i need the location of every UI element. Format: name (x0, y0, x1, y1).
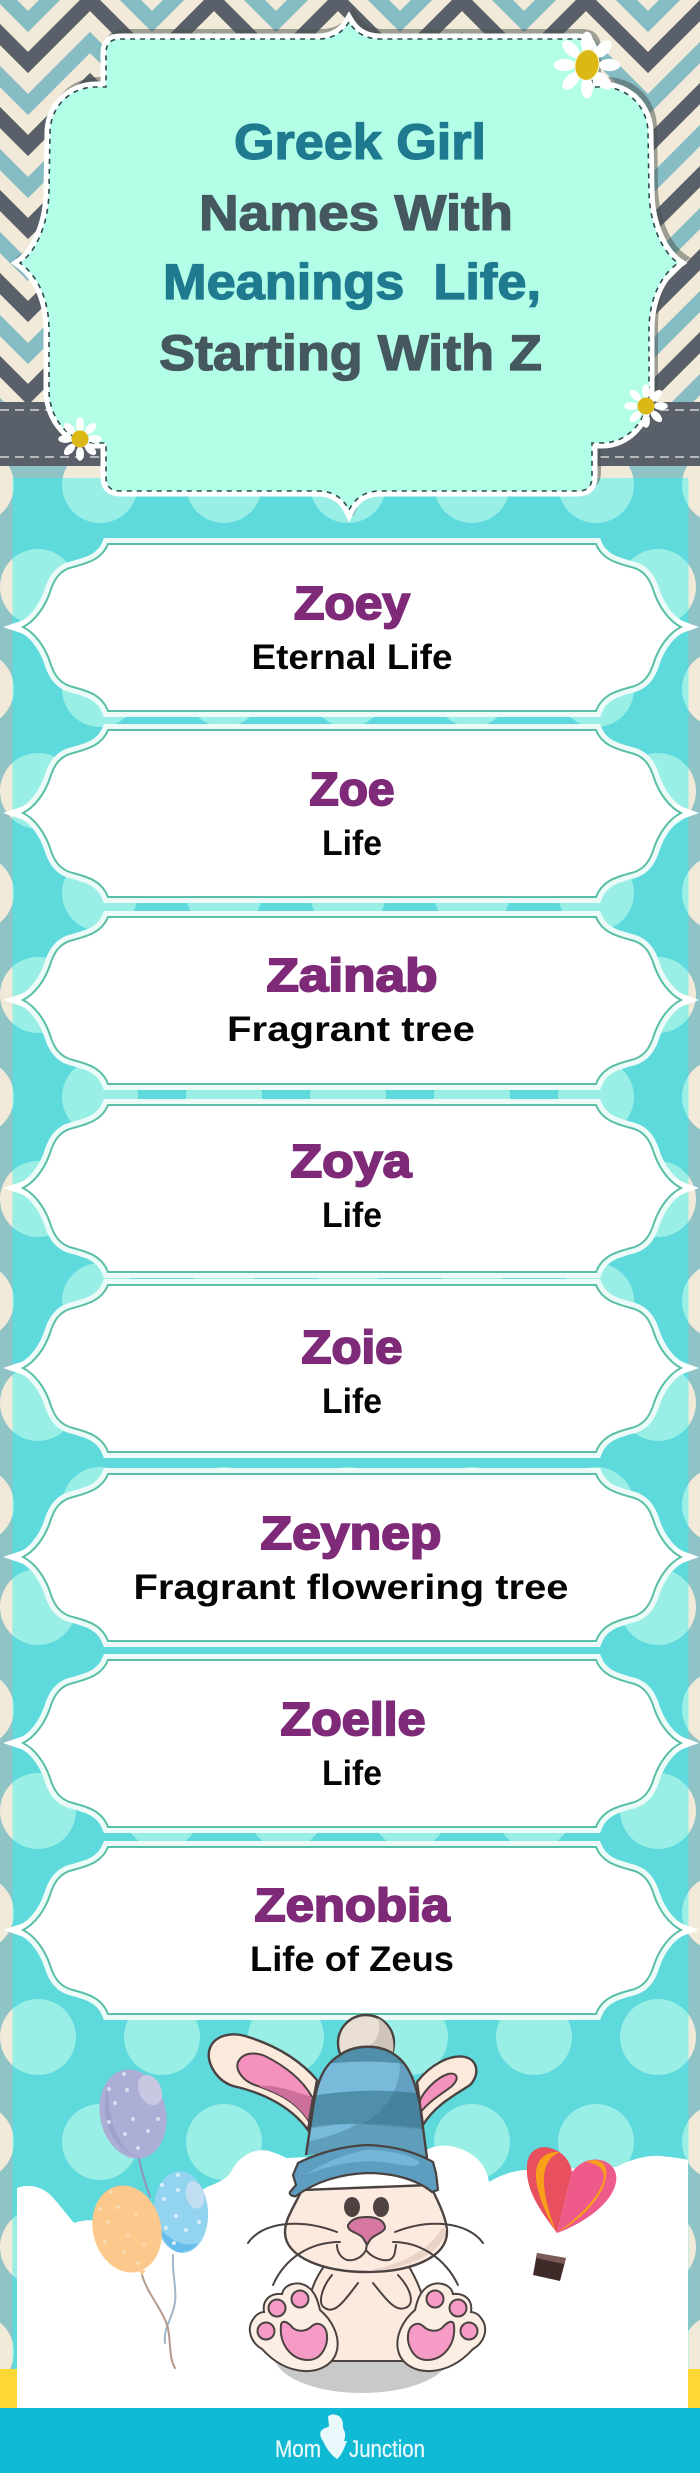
stitched grey banner (0, 402, 700, 466)
right foot (397, 2283, 485, 2371)
blue balloon (151, 2169, 211, 2255)
balloon basket (533, 2253, 566, 2281)
balloon envelope (527, 2147, 616, 2233)
balloon strings (139, 2158, 175, 2368)
card: Zenobia: Zenobia (254, 1879, 450, 1931)
arms (321, 2275, 411, 2310)
title: Starting With Z (159, 325, 542, 381)
card: Zoey (3, 544, 699, 711)
card: Zoe (3, 730, 699, 897)
purple balloon (91, 2063, 175, 2165)
title: Meanings Life, (163, 254, 541, 310)
white cloud (17, 2146, 688, 2408)
logo icon (320, 2414, 347, 2459)
yellow side accents (0, 2369, 700, 2408)
card: Zoie: Life (322, 1382, 382, 1421)
logo: MomJunction: Junction (349, 2436, 425, 2463)
card: Zeynep (3, 1474, 699, 1641)
card: Zoe: Life (322, 824, 382, 863)
icon: balloons (83, 2063, 211, 2368)
illustration: bunny in a striped hat (209, 2015, 485, 2393)
orange balloon (83, 2178, 171, 2280)
hat brim (290, 2145, 438, 2196)
card: Zainab (3, 917, 699, 1084)
nose and mouth (337, 2217, 396, 2260)
background: chevron pattern (0, 0, 700, 402)
icon: heart hot-air balloon (527, 2147, 616, 2281)
card: Zoey: Zoey (294, 577, 410, 629)
icon: large daisy (554, 32, 620, 98)
pompom (338, 2015, 394, 2071)
right ear (417, 2057, 476, 2125)
eyes (344, 2197, 389, 2217)
logo: MomJunction: Mom (275, 2436, 321, 2463)
logo: MomJunction (275, 2414, 425, 2463)
card: Zainab: Zainab (266, 949, 438, 1001)
icon: small daisy right (624, 384, 668, 428)
card: Zoelle: Life (322, 1754, 382, 1793)
card: Zenobia (3, 1847, 699, 2014)
card: Zoelle (3, 1660, 699, 1827)
left foot (250, 2283, 338, 2371)
card: Zoe: Zoe (310, 763, 394, 815)
ground shadow (274, 2317, 450, 2393)
whiskers (248, 2224, 483, 2285)
title: Names With (199, 185, 513, 241)
footer bar (0, 2408, 700, 2473)
card: Zainab: Fragrant tree (227, 1010, 475, 1049)
body (308, 2265, 426, 2361)
card: Zoya: Zoya (290, 1135, 412, 1187)
card: Zoya (3, 1105, 699, 1272)
head (285, 2185, 447, 2272)
card: Zoie: Zoie (302, 1321, 402, 1373)
card: Zoey: Eternal Life (252, 638, 452, 677)
left ear (209, 2034, 317, 2130)
card: Zoelle: Zoelle (280, 1693, 426, 1745)
card: Zenobia: Life of Zeus (250, 1940, 454, 1979)
title plaque (20, 17, 682, 510)
card: Zeynep: Zeynep (260, 1507, 442, 1559)
card: Zeynep: Fragrant flowering tree (134, 1568, 568, 1607)
hat crown (300, 2047, 430, 2160)
icon: small daisy left (58, 417, 102, 461)
title (159, 114, 542, 381)
card: Zoya: Life (322, 1196, 382, 1235)
title: Greek Girl (234, 114, 486, 170)
card: Zoie (3, 1285, 699, 1452)
